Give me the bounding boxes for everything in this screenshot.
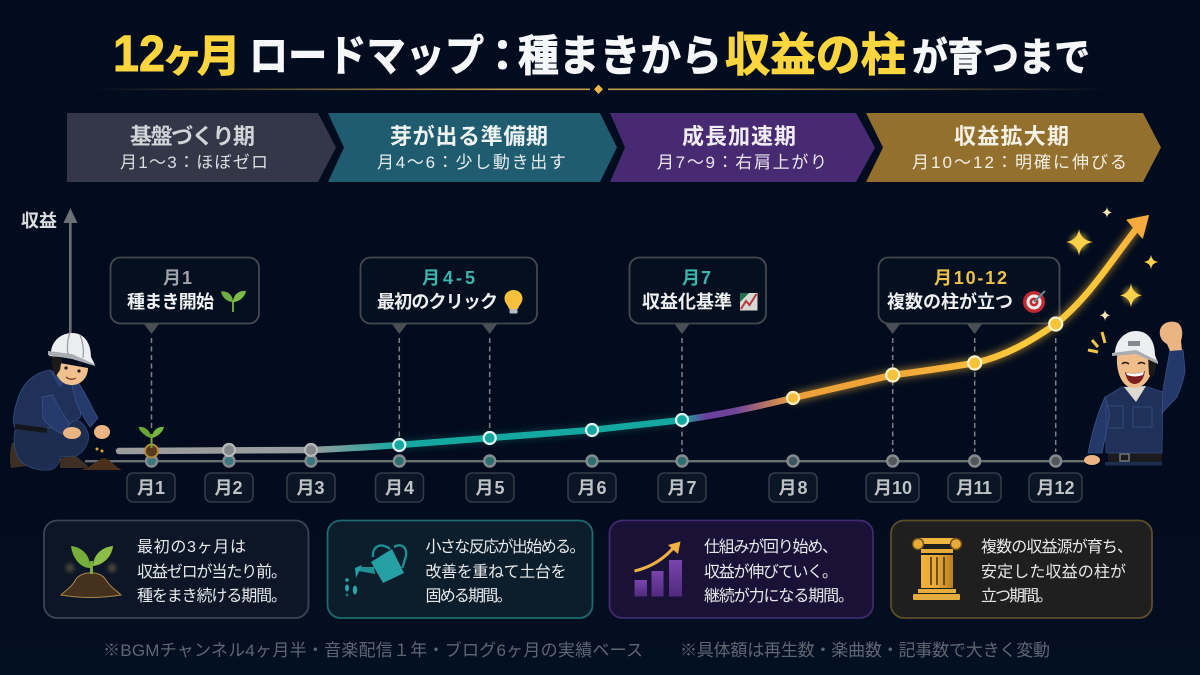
shirt collar	[1124, 386, 1146, 402]
icon: light bulb	[504, 290, 522, 314]
text: 種をまき続ける期間。	[137, 587, 287, 605]
month labels: 月8	[778, 478, 808, 498]
callout: months 4-5: 月4-5	[422, 268, 475, 288]
near arm	[42, 395, 70, 434]
callout: month 7	[630, 258, 766, 334]
revenue axis label: 収益	[21, 211, 57, 231]
callout: months 10-12: 月10-12	[934, 268, 1007, 288]
text	[426, 538, 586, 605]
time axis line	[85, 460, 1095, 462]
soil mound	[81, 458, 122, 470]
text: 継続が力になる期間。	[704, 587, 854, 605]
month labels: 月10	[874, 478, 912, 498]
head	[54, 362, 88, 385]
left hand	[1084, 455, 1100, 465]
sparkles	[1066, 207, 1158, 321]
revenue axis arrow	[64, 208, 78, 334]
title: 12	[113, 25, 165, 82]
hands	[63, 427, 81, 439]
text: 固める期間。	[426, 587, 512, 605]
panel: growth	[610, 520, 873, 618]
phase 1: 月1〜3：ほぼゼロ	[120, 153, 268, 172]
panel: foundation	[44, 520, 308, 618]
collar	[50, 371, 68, 388]
phase 2	[328, 113, 617, 182]
torso	[14, 370, 83, 428]
text: 改善を重ねて土台を	[426, 563, 566, 581]
text: 仕組みが回り始め、	[704, 538, 838, 556]
month labels: 月6	[578, 478, 606, 498]
footnote: variance: ※具体額は再生数・楽曲数・記事数で大きく変動	[680, 641, 1050, 660]
icon: sprout in soil	[61, 546, 121, 598]
phase 4: 月10〜12：明確に伸びる	[912, 153, 1127, 172]
phase 2: 月4〜6：少し動き出す	[377, 153, 566, 172]
curve data points	[223, 318, 1062, 456]
icon: rising bars and arrow	[634, 542, 682, 596]
text: 立つ期間。	[981, 587, 1053, 605]
text: 収益が伸びていく。	[704, 563, 838, 581]
text: 複数の収益源が育ち、	[981, 538, 1133, 556]
footnote: basis of results: ※BGMチャンネル4ヶ月半・音楽配信１年・ブログ6ヶ月の実績ベース	[103, 640, 643, 660]
phase 3	[610, 113, 875, 182]
cheer lines	[1088, 332, 1105, 352]
icon: seed and sprout at month 1	[138, 427, 164, 458]
belt	[1108, 453, 1162, 462]
phase 4: 収益拡大期	[954, 124, 1069, 149]
callout: month 7: 収益化基準	[642, 291, 732, 312]
text: 最初の3ヶ月は	[137, 538, 246, 556]
text	[137, 538, 287, 605]
text: 小さな反応が出始める。	[426, 538, 586, 556]
phase 3: 成長加速期	[682, 124, 796, 149]
torso	[1105, 387, 1163, 453]
illustration: kneeling worker sowing seeds	[10, 333, 122, 470]
text: 安定した収益の柱が	[981, 563, 1126, 581]
month labels: 月11	[956, 478, 992, 498]
icon: target	[1023, 291, 1045, 313]
phase 1	[67, 113, 336, 182]
title: ：	[481, 33, 524, 81]
icon: watering can	[345, 545, 406, 596]
revenue growth curve	[119, 216, 1148, 451]
far arm	[72, 382, 98, 427]
icon: pillar	[912, 538, 962, 600]
panel: preparation	[328, 520, 592, 618]
callout: months 4-5: 最初のクリック	[377, 292, 498, 312]
phase 2: 芽が出る準備期	[390, 124, 548, 149]
phase 3: 月7〜9：右肩上がり	[657, 153, 827, 172]
open mouth	[1125, 371, 1145, 384]
title: が育つまで	[912, 37, 1090, 80]
callout: month 1: 種まき開始	[127, 292, 214, 312]
fist	[1160, 322, 1182, 351]
phase 4	[866, 113, 1161, 182]
month labels: 月12	[1036, 478, 1074, 498]
dashed leader lines	[152, 338, 1056, 452]
icon: seedling	[221, 291, 246, 312]
callout: months 10-12	[878, 258, 1060, 334]
month labels: 月2	[214, 478, 242, 498]
text	[981, 538, 1133, 605]
callout: month 7: 月7	[682, 268, 711, 288]
icon: chart	[740, 293, 758, 310]
month labels: 月1	[137, 478, 165, 498]
callout: month 1	[110, 258, 259, 334]
callout: months 10-12: 複数の柱が立つ	[887, 291, 1013, 312]
title divider	[90, 84, 1110, 95]
month labels: 月7	[668, 478, 696, 498]
helmet	[1112, 331, 1158, 363]
title: 種まきから	[518, 33, 722, 81]
month labels: 月3	[296, 478, 324, 498]
callout: months 4-5	[360, 258, 537, 334]
month labels: 月5	[476, 478, 504, 498]
lowered arm	[1088, 397, 1110, 453]
helmet	[49, 333, 95, 365]
illustration: cheering worker	[1084, 322, 1185, 466]
panel: expansion	[891, 520, 1152, 618]
pockets	[1106, 406, 1152, 428]
title: 月	[197, 32, 241, 81]
text: 収益ゼロが当たり前。	[137, 563, 287, 581]
raised arm	[1162, 350, 1185, 413]
title: ロードマップ	[249, 33, 484, 81]
title	[113, 25, 1090, 82]
title: ヶ	[162, 34, 203, 80]
head	[1117, 345, 1153, 388]
month labels	[127, 473, 1082, 502]
phase 1: 基盤づくり期	[130, 124, 255, 149]
month labels: 月4	[385, 478, 414, 498]
text	[704, 538, 854, 605]
smiling eyes	[1122, 362, 1145, 364]
title: 収益の柱	[725, 29, 906, 81]
boots	[10, 443, 26, 468]
callout: month 1: 月1	[163, 268, 192, 288]
belt	[15, 424, 47, 433]
axis month dots	[146, 456, 1061, 466]
legs	[14, 420, 89, 470]
phase banner	[67, 113, 1161, 182]
